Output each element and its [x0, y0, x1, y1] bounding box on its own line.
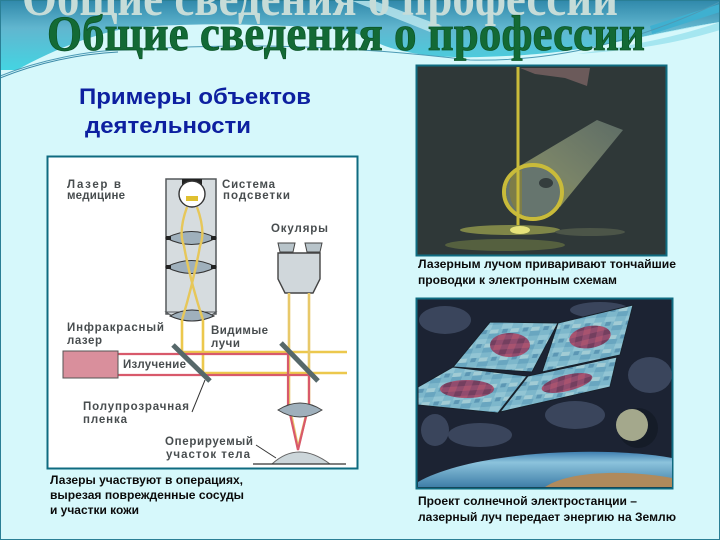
panel red cells: [440, 323, 613, 398]
caption: welding: проводки к электронным схемам: [418, 275, 617, 287]
photo: solar power station: [416, 298, 672, 488]
nebula patches: [419, 302, 672, 447]
diagram labels: Полупрозрачная: [83, 401, 189, 413]
diagram labels: [67, 179, 328, 461]
diagram labels: Лазер в: [67, 179, 121, 191]
diagram labels: пленка: [83, 414, 128, 426]
diagram labels: Система: [222, 179, 276, 191]
diagram labels: медицине: [67, 190, 125, 202]
caption: lasers in surgery: вырезая поврежденные сосуды: [50, 490, 244, 502]
diagram labels: Излучение: [123, 359, 186, 371]
caption: lasers in surgery: и участки кожи: [50, 505, 139, 517]
semi-transparent mirrors: [173, 343, 318, 381]
subtitle: деятельности: [85, 113, 251, 138]
caption: solar station: Проект солнечной электростанции –: [418, 496, 638, 508]
eyepiece: [278, 243, 322, 293]
microscope tube: [166, 179, 216, 321]
caption: solar station: [418, 496, 676, 524]
caption: welding: [418, 259, 676, 287]
diagram labels: Видимые: [211, 325, 268, 337]
infrared laser box: [63, 351, 118, 378]
diagram labels: лучи: [211, 338, 240, 350]
diagram labels: Окуляры: [271, 223, 328, 235]
optical beams: [118, 293, 347, 450]
diagram labels: Инфракрасный: [67, 322, 164, 334]
moon: [616, 408, 658, 448]
subtitle: Примеры объектов: [79, 84, 311, 109]
diagram labels: участок тела: [166, 449, 251, 461]
diagram labels: подсветки: [223, 190, 290, 202]
caption: lasers in surgery: [50, 475, 244, 517]
caption: welding: Лазерным лучом приваривают тончайшие: [418, 259, 676, 271]
diagram labels: лазер: [67, 335, 102, 347]
panel: laser in medicine diagram: [48, 156, 358, 468]
photo: laser welding: [416, 66, 666, 256]
operated tissue: [192, 380, 346, 464]
subtitle: [79, 84, 311, 138]
caption: lasers in surgery: Лазеры участвуют в операциях,: [50, 475, 243, 487]
earth: [418, 452, 672, 487]
title: Общие сведения о профессии: [47, 5, 645, 61]
solar panels: [418, 305, 633, 413]
caption: solar station: лазерный луч передает энергию на Землю: [418, 512, 676, 524]
objective lens: [278, 403, 322, 417]
diagram labels: Оперируемый: [165, 436, 253, 448]
